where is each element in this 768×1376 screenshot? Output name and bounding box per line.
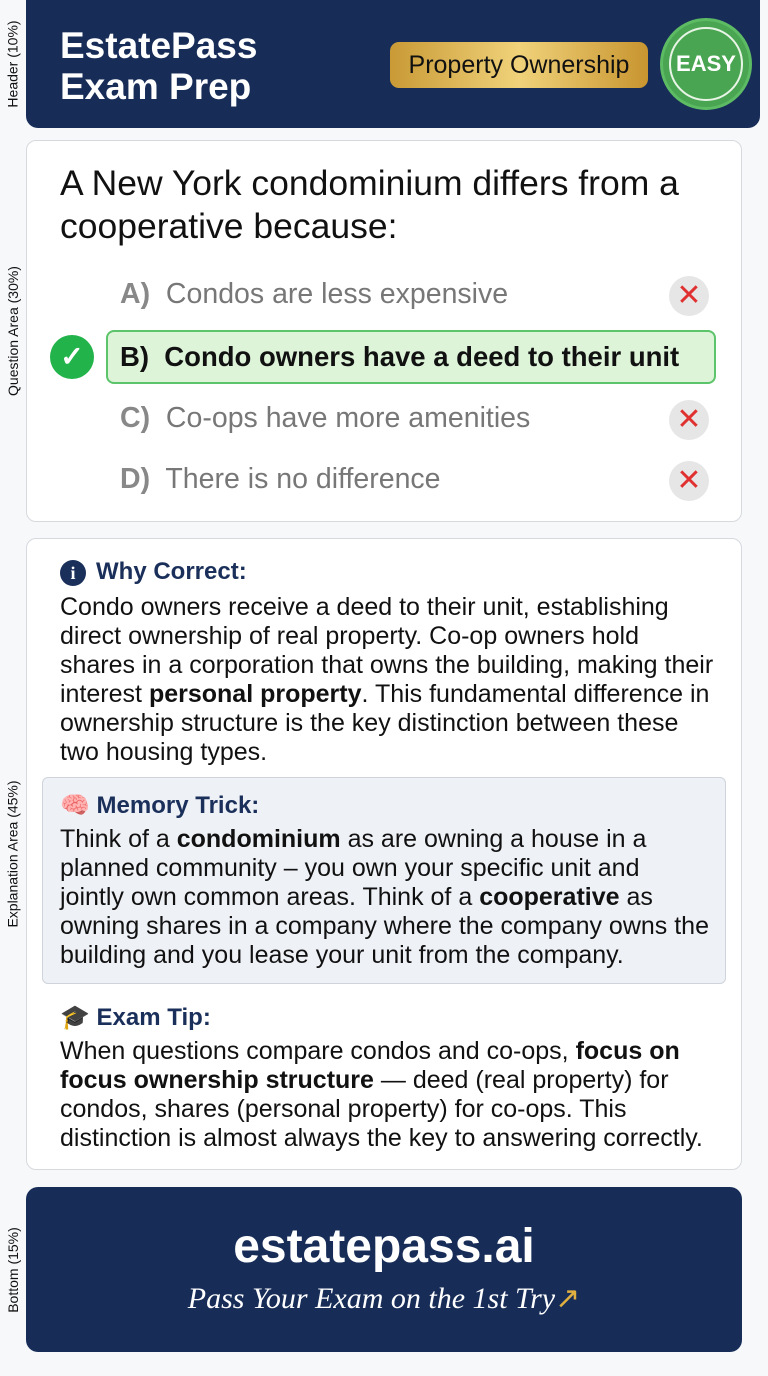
topic pill [390,42,648,88]
memory trick box [42,777,726,984]
topic pill: Property Ownership [409,51,629,79]
difficulty badge [660,18,752,110]
side label: header: Header (10%) [5,20,21,108]
why correct text: two housing types. [60,738,267,766]
memory trick text: building and you lease your unit from the company. [60,941,624,969]
why correct text: shares in a corporation that owns the building, making their [60,651,713,679]
question text [60,163,679,246]
option A: A) Condos are less expensive [120,278,508,310]
exam tip text: When questions compare condos and co-ops, focus on [60,1037,680,1065]
exam tip text: distinction is almost always the key to answering correctly. [60,1124,703,1152]
question card [26,140,742,522]
wrong icon D: ✕ [676,464,702,497]
tagline: Pass Your Exam on the 1st Try↗ [188,1282,580,1315]
wrong icon A: ✕ [676,279,702,312]
difficulty badge: EASY [676,51,736,76]
check icon: ✓ [60,341,84,372]
option B correct: B) Condo owners have a deed to their unit [120,341,679,372]
why correct text [60,593,713,766]
option B correct [106,330,716,384]
bottom banner [26,1187,742,1352]
why correct text: Condo owners receive a deed to their unit, establishing [60,593,669,621]
wrong icon C: ✕ [676,403,702,436]
wrong icon C [669,400,709,440]
title [60,25,257,107]
why correct text: ownership structure is the key distinction between these [60,709,678,737]
memory trick text: owning shares in a company where the company owns the [60,912,709,940]
header panel [26,0,760,128]
wrong icon A [669,276,709,316]
memory trick text [59,825,709,969]
question text: A New York condominium differs from a [60,163,679,203]
memory trick text: planned community – you own your specific unit and [60,854,640,882]
wrong icon D [669,461,709,501]
memory trick heading: 🧠 Memory Trick: [60,792,259,819]
why correct heading: i [70,563,76,583]
memory trick text: Think of a condominium as are owning a house in a [60,825,646,853]
site name: estatepass.ai [233,1220,535,1273]
exam tip text: condos, shares (personal property) for co-ops. This [60,1095,626,1123]
side label: bottom: Bottom (15%) [5,1227,21,1312]
exam tip text [60,1037,703,1152]
side label: explanation area: Explanation Area (45%) [5,780,21,928]
check icon [50,335,94,379]
explanation card [26,538,742,1170]
title: EstatePass [60,25,257,66]
why correct heading: Why Correct: [96,558,247,585]
memory trick text: jointly own common areas. Think of a cooperative as [60,883,653,911]
why correct text: direct ownership of real property. Co-op owners hold [60,622,639,650]
exam tip text: focus ownership structure — deed (real property) for [60,1066,669,1094]
exam tip heading: 🎓 Exam Tip: [60,1004,211,1031]
question text: cooperative because: [60,206,397,246]
option C: C) Co-ops have more amenities [120,402,530,434]
side label: question area: Question Area (30%) [5,266,21,396]
title: Exam Prep [60,66,251,107]
why correct text: interest personal property. This fundamental difference in [60,680,709,708]
option D: D) There is no difference [120,463,441,495]
